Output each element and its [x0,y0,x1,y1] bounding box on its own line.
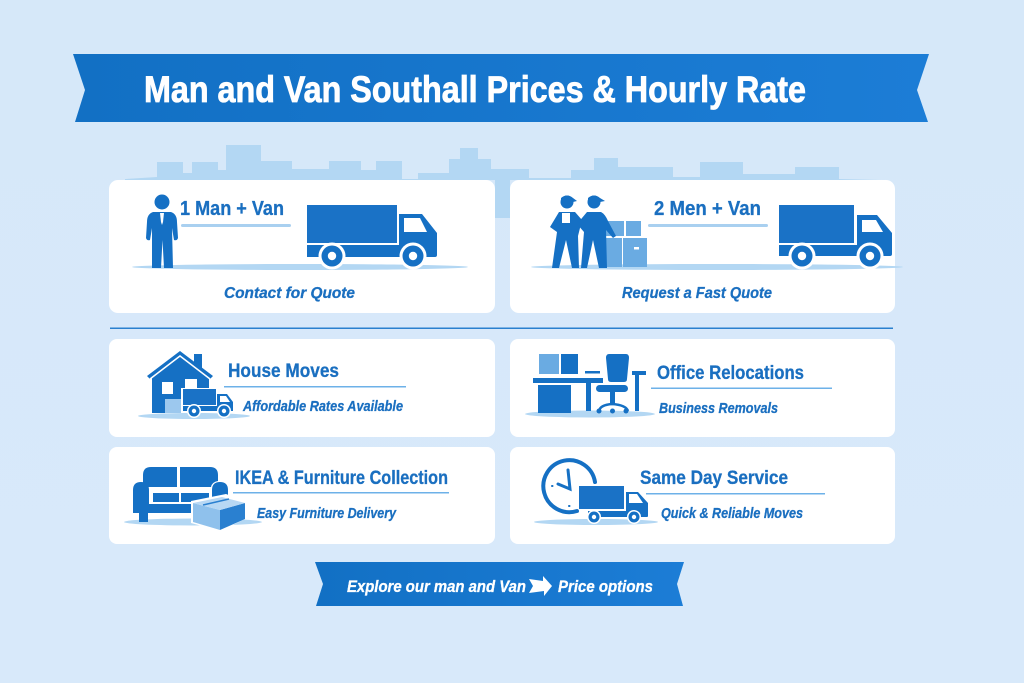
icon: sofa [133,467,228,522]
heading rule [233,492,449,494]
card [510,447,895,544]
heading rule [651,388,832,389]
heading rule [646,493,825,494]
divider [110,328,893,329]
banner ribbon [73,54,929,122]
caption: Business Removals [659,401,778,417]
card [510,339,895,437]
heading: Same Day Service [640,467,788,489]
ground shadow [132,264,468,270]
skyline [125,145,880,218]
ground shadow [124,518,262,526]
call to action text right: Price options [558,578,653,596]
ground shadow [138,413,250,419]
banner ribbon [315,562,684,606]
caption: Contact for Quote [224,285,355,302]
card [109,447,495,544]
call to action banner [315,562,684,606]
caption: Quick & Reliable Moves [661,506,803,522]
ground shadow [525,410,655,418]
heading: IKEA & Furniture Collection [235,467,448,489]
icon: small truck [181,388,235,418]
call to action text left: Explore our man and Van [347,578,526,596]
card [109,339,495,437]
icon: desk with chair [533,354,646,414]
icon: truck [307,205,437,270]
heading: 1 Man + Van [180,197,284,220]
heading rule [224,386,406,388]
title: Man and Van Southall Prices & Hourly Rate [144,69,806,110]
panel: house moves [109,339,495,437]
panel: office relocations [510,339,895,437]
heading: 2 Men + Van [654,197,761,220]
icon: clock [543,460,595,512]
heading rule [181,224,291,227]
ground shadow [534,519,658,525]
panel: ikea and furniture collection [109,447,495,544]
icon: man in suit [146,194,178,268]
icon: two workers [550,196,616,268]
card [510,180,895,313]
icon: arrow [529,576,552,596]
heading rule [648,224,768,227]
caption: Request a Fast Quote [622,285,772,302]
heading: Office Relocations [657,362,804,384]
panel: same day service [510,447,895,544]
icon: cardboard box [191,494,247,531]
caption: Easy Furniture Delivery [257,506,397,522]
ground shadow [531,264,903,270]
panel: 2 men and van [510,180,903,313]
title banner [73,54,929,122]
icon: boxes [603,221,647,267]
icon: truck [579,486,648,524]
caption: Affordable Rates Available [242,399,403,415]
icon: truck [779,205,892,270]
heading: House Moves [228,360,339,382]
card [109,180,495,313]
icon: house [147,351,213,413]
panel: 1 man and van [109,180,495,313]
